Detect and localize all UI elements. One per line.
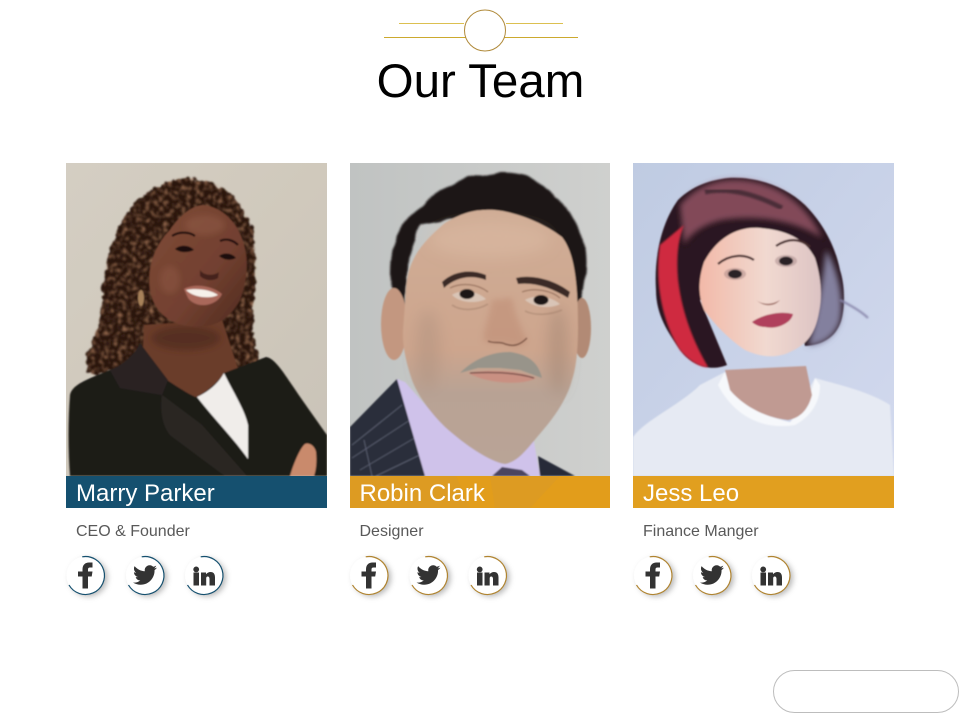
name banner <box>350 476 610 508</box>
photo: Jess Leo <box>633 163 894 476</box>
name: Marry Parker <box>76 480 215 507</box>
role: CEO & Founder <box>76 523 190 540</box>
icon: facebook <box>350 556 388 595</box>
icon: linkedin <box>185 556 223 595</box>
icon: twitter <box>410 556 448 595</box>
icon: twitter <box>126 556 164 595</box>
role: Finance Manger <box>643 523 759 540</box>
name banner <box>633 476 894 508</box>
title: Our Team <box>377 55 584 108</box>
icon: twitter <box>693 556 731 595</box>
role: Designer <box>360 523 424 540</box>
photo: Marry Parker <box>66 163 327 476</box>
name banner <box>66 476 327 508</box>
panel: Marry Parker <box>66 163 327 595</box>
name: Robin Clark <box>360 480 486 507</box>
icon: facebook <box>66 556 104 595</box>
icon: linkedin <box>468 556 506 595</box>
panel: Robin Clark <box>350 163 610 595</box>
header ornament <box>384 10 578 51</box>
name: Jess Leo <box>643 480 739 507</box>
empty pill button <box>774 670 958 712</box>
panel: Jess Leo <box>633 163 894 595</box>
icon: facebook <box>634 556 672 595</box>
icon: linkedin <box>752 556 790 595</box>
photo: Robin Clark <box>350 163 610 476</box>
